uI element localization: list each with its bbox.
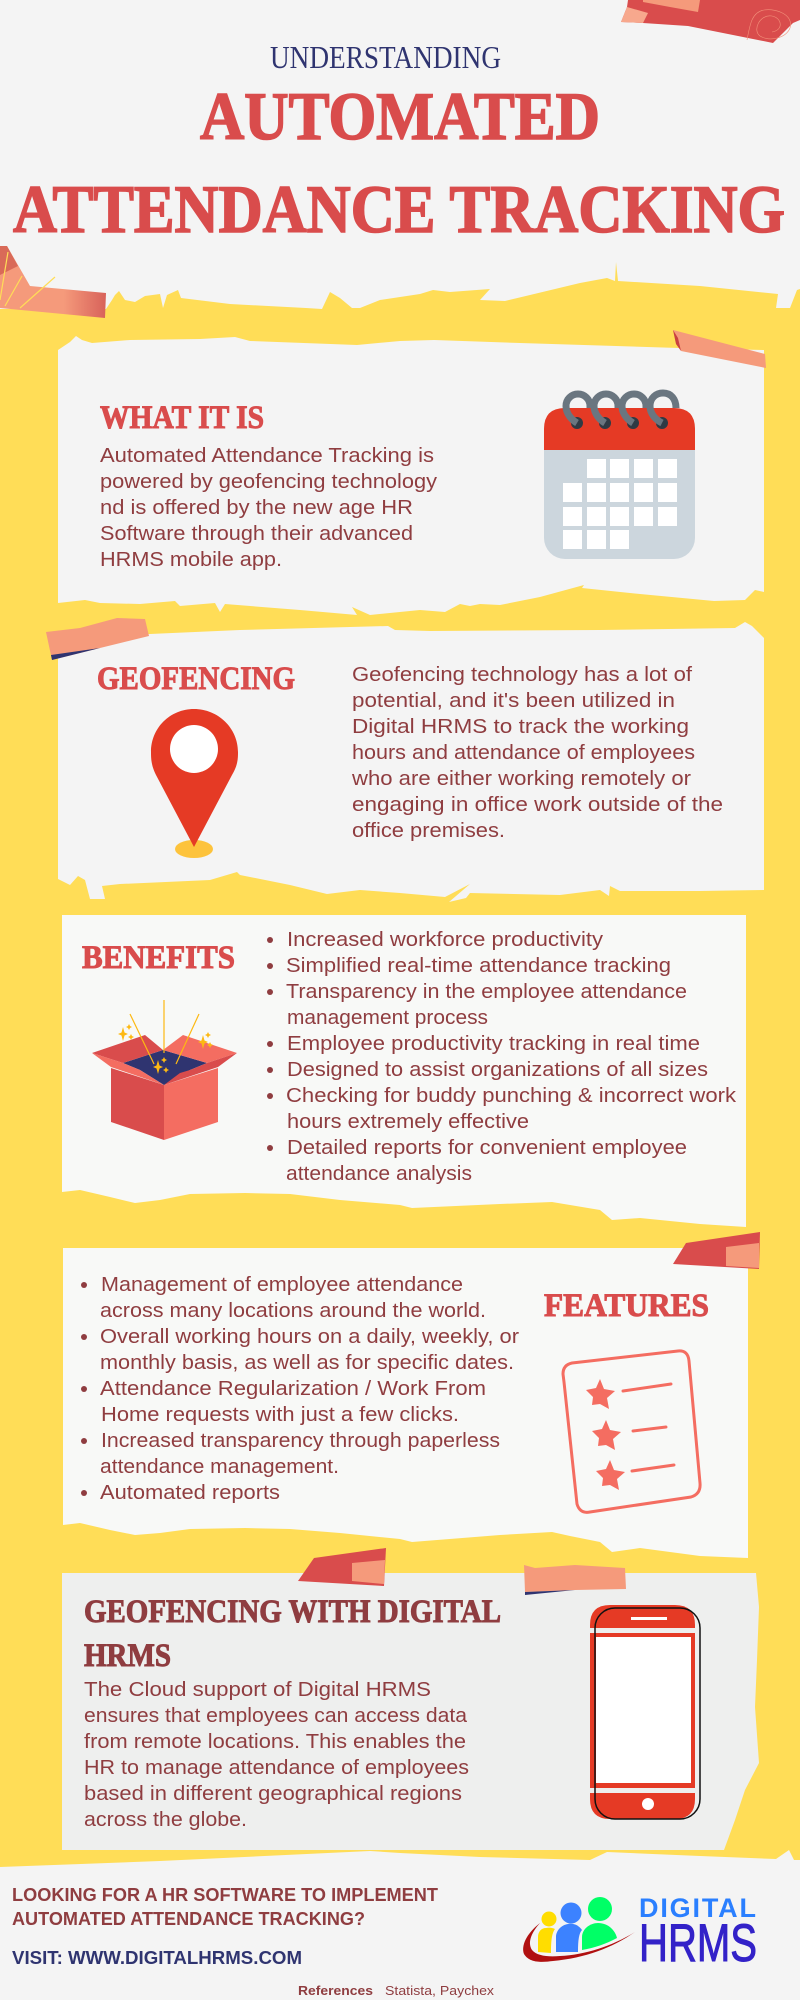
references: [298, 1983, 495, 1998]
heading: geofencing with digital hrms: [84, 1594, 501, 1674]
icon: smartphone: [590, 1605, 700, 1819]
body text: what it is: Software through their advanced: [100, 523, 413, 545]
body text: geofencing: hours and attendance of employees: [352, 742, 695, 764]
body text: geofencing with digital hrms: based in different geographical regions: [84, 1783, 462, 1805]
decoration: tape: [46, 618, 149, 660]
decoration: salmon tape: [524, 1565, 626, 1595]
bullet list: benefits: [267, 929, 737, 1185]
body text: geofencing: engaging in office work outside of the: [352, 794, 723, 816]
decoration: top right torn paper: [621, 0, 800, 43]
icon: gift box: [92, 1000, 237, 1140]
panel: features: [63, 1232, 760, 1558]
body text: geofencing: who are either working remotely or: [351, 768, 691, 790]
heading: features: FEATURES: [544, 1288, 709, 1324]
logo: digital hrms: DIGITAL: [639, 1893, 756, 1923]
body text: what it is: nd is offered by the new age HR: [100, 497, 413, 519]
title: AUTOMATED: [200, 78, 600, 154]
body text: what it is: powered by geofencing technology: [100, 471, 437, 493]
body text: geofencing with digital hrms: across the globe.: [84, 1809, 247, 1831]
body text: what it is: [100, 445, 437, 571]
icon: calendar: [544, 393, 695, 559]
body text: geofencing: Geofencing technology has a lot of: [352, 664, 692, 686]
body text: geofencing with digital hrms: ensures that employees can access data: [84, 1705, 468, 1727]
footer call to action: AUTOMATED ATTENDANCE TRACKING?: [12, 1909, 365, 1929]
bullet list: features: Attendance Regularization / Work From: [100, 1378, 486, 1400]
bullet list: features: Home requests with just a few clicks.: [101, 1404, 459, 1426]
body text: geofencing: potential, and it's been utilized in: [352, 690, 675, 712]
bullet list: features: monthly basis, as well as for specific dates.: [100, 1352, 514, 1374]
references: References: [298, 1983, 373, 1998]
body text: geofencing: office premises.: [352, 820, 505, 842]
references: Statista, Paychex: [385, 1983, 495, 1998]
heading: geofencing with digital hrms: HRMS: [84, 1638, 171, 1674]
bullet list: features: Increased transparency through paperless: [101, 1430, 500, 1452]
heading: geofencing: GEOFENCING: [97, 661, 295, 697]
body text: geofencing: [351, 664, 723, 842]
bullet list: benefits: management process: [287, 1007, 488, 1029]
title: UNDERSTANDING: [270, 39, 501, 75]
bullet list: benefits: Simplified real-time attendance tracking: [286, 955, 671, 977]
bullet list: benefits: Transparency in the employee attendance: [286, 981, 687, 1003]
bullet list: benefits: hours extremely effective: [287, 1111, 529, 1133]
logo: digital hrms: [523, 1893, 757, 1973]
bullet list: features: Management of employee attendance: [101, 1274, 463, 1296]
title: [13, 39, 785, 247]
bullet list: features: Automated reports: [100, 1482, 280, 1504]
panel: benefits: [62, 915, 746, 1227]
decoration: left torn paper: [0, 246, 106, 318]
panel: geofencing with digital hrms: [62, 1548, 759, 1850]
decoration: tape: [673, 330, 766, 368]
bullet list: features: Overall working hours on a daily, weekly, or: [100, 1326, 519, 1348]
footer call to action: VISIT: WWW.DIGITALHRMS.COM: [12, 1948, 302, 1968]
bullet list: benefits: Designed to assist organizations of all sizes: [287, 1059, 708, 1081]
bullet list: benefits: attendance analysis: [286, 1163, 472, 1185]
footer call to action: [12, 1885, 438, 1968]
bullet list: features: attendance management.: [100, 1456, 339, 1478]
bullet list: features: across many locations around the world.: [100, 1300, 486, 1322]
bullet list: benefits: Employee productivity tracking in real time: [287, 1033, 700, 1055]
body text: geofencing with digital hrms: [84, 1679, 469, 1831]
decoration: tape: [673, 1232, 760, 1269]
bullet list: features: [81, 1274, 519, 1504]
heading: what it is: WHAT IT IS: [100, 400, 264, 436]
body text: what it is: HRMS mobile app.: [100, 549, 282, 571]
icon: location pin: [151, 709, 238, 858]
logo: digital hrms: HRMS: [639, 1914, 757, 1973]
icon: star checklist: [563, 1351, 700, 1512]
heading: benefits: BENEFITS: [82, 940, 235, 976]
bullet list: benefits: Checking for buddy punching & incorrect work: [286, 1085, 737, 1107]
body text: geofencing with digital hrms: from remote locations. This enables the: [84, 1731, 466, 1753]
footer call to action: LOOKING FOR A HR SOFTWARE TO IMPLEMENT: [12, 1885, 438, 1905]
panel: what it is: [58, 330, 766, 615]
body text: geofencing with digital hrms: HR to manage attendance of employees: [84, 1757, 469, 1779]
bullet list: benefits: Detailed reports for convenient employee: [287, 1137, 687, 1159]
bullet list: benefits: Increased workforce productivity: [287, 929, 603, 951]
body text: what it is: Automated Attendance Tracking is: [100, 445, 434, 467]
body text: geofencing: Digital HRMS to track the working: [352, 716, 689, 738]
heading: geofencing with digital hrms: GEOFENCING WITH DIGITAL: [84, 1594, 501, 1630]
panel: geofencing: [46, 618, 764, 902]
body text: geofencing with digital hrms: The Cloud support of Digital HRMS: [84, 1679, 431, 1701]
decoration: red tape: [298, 1548, 386, 1586]
